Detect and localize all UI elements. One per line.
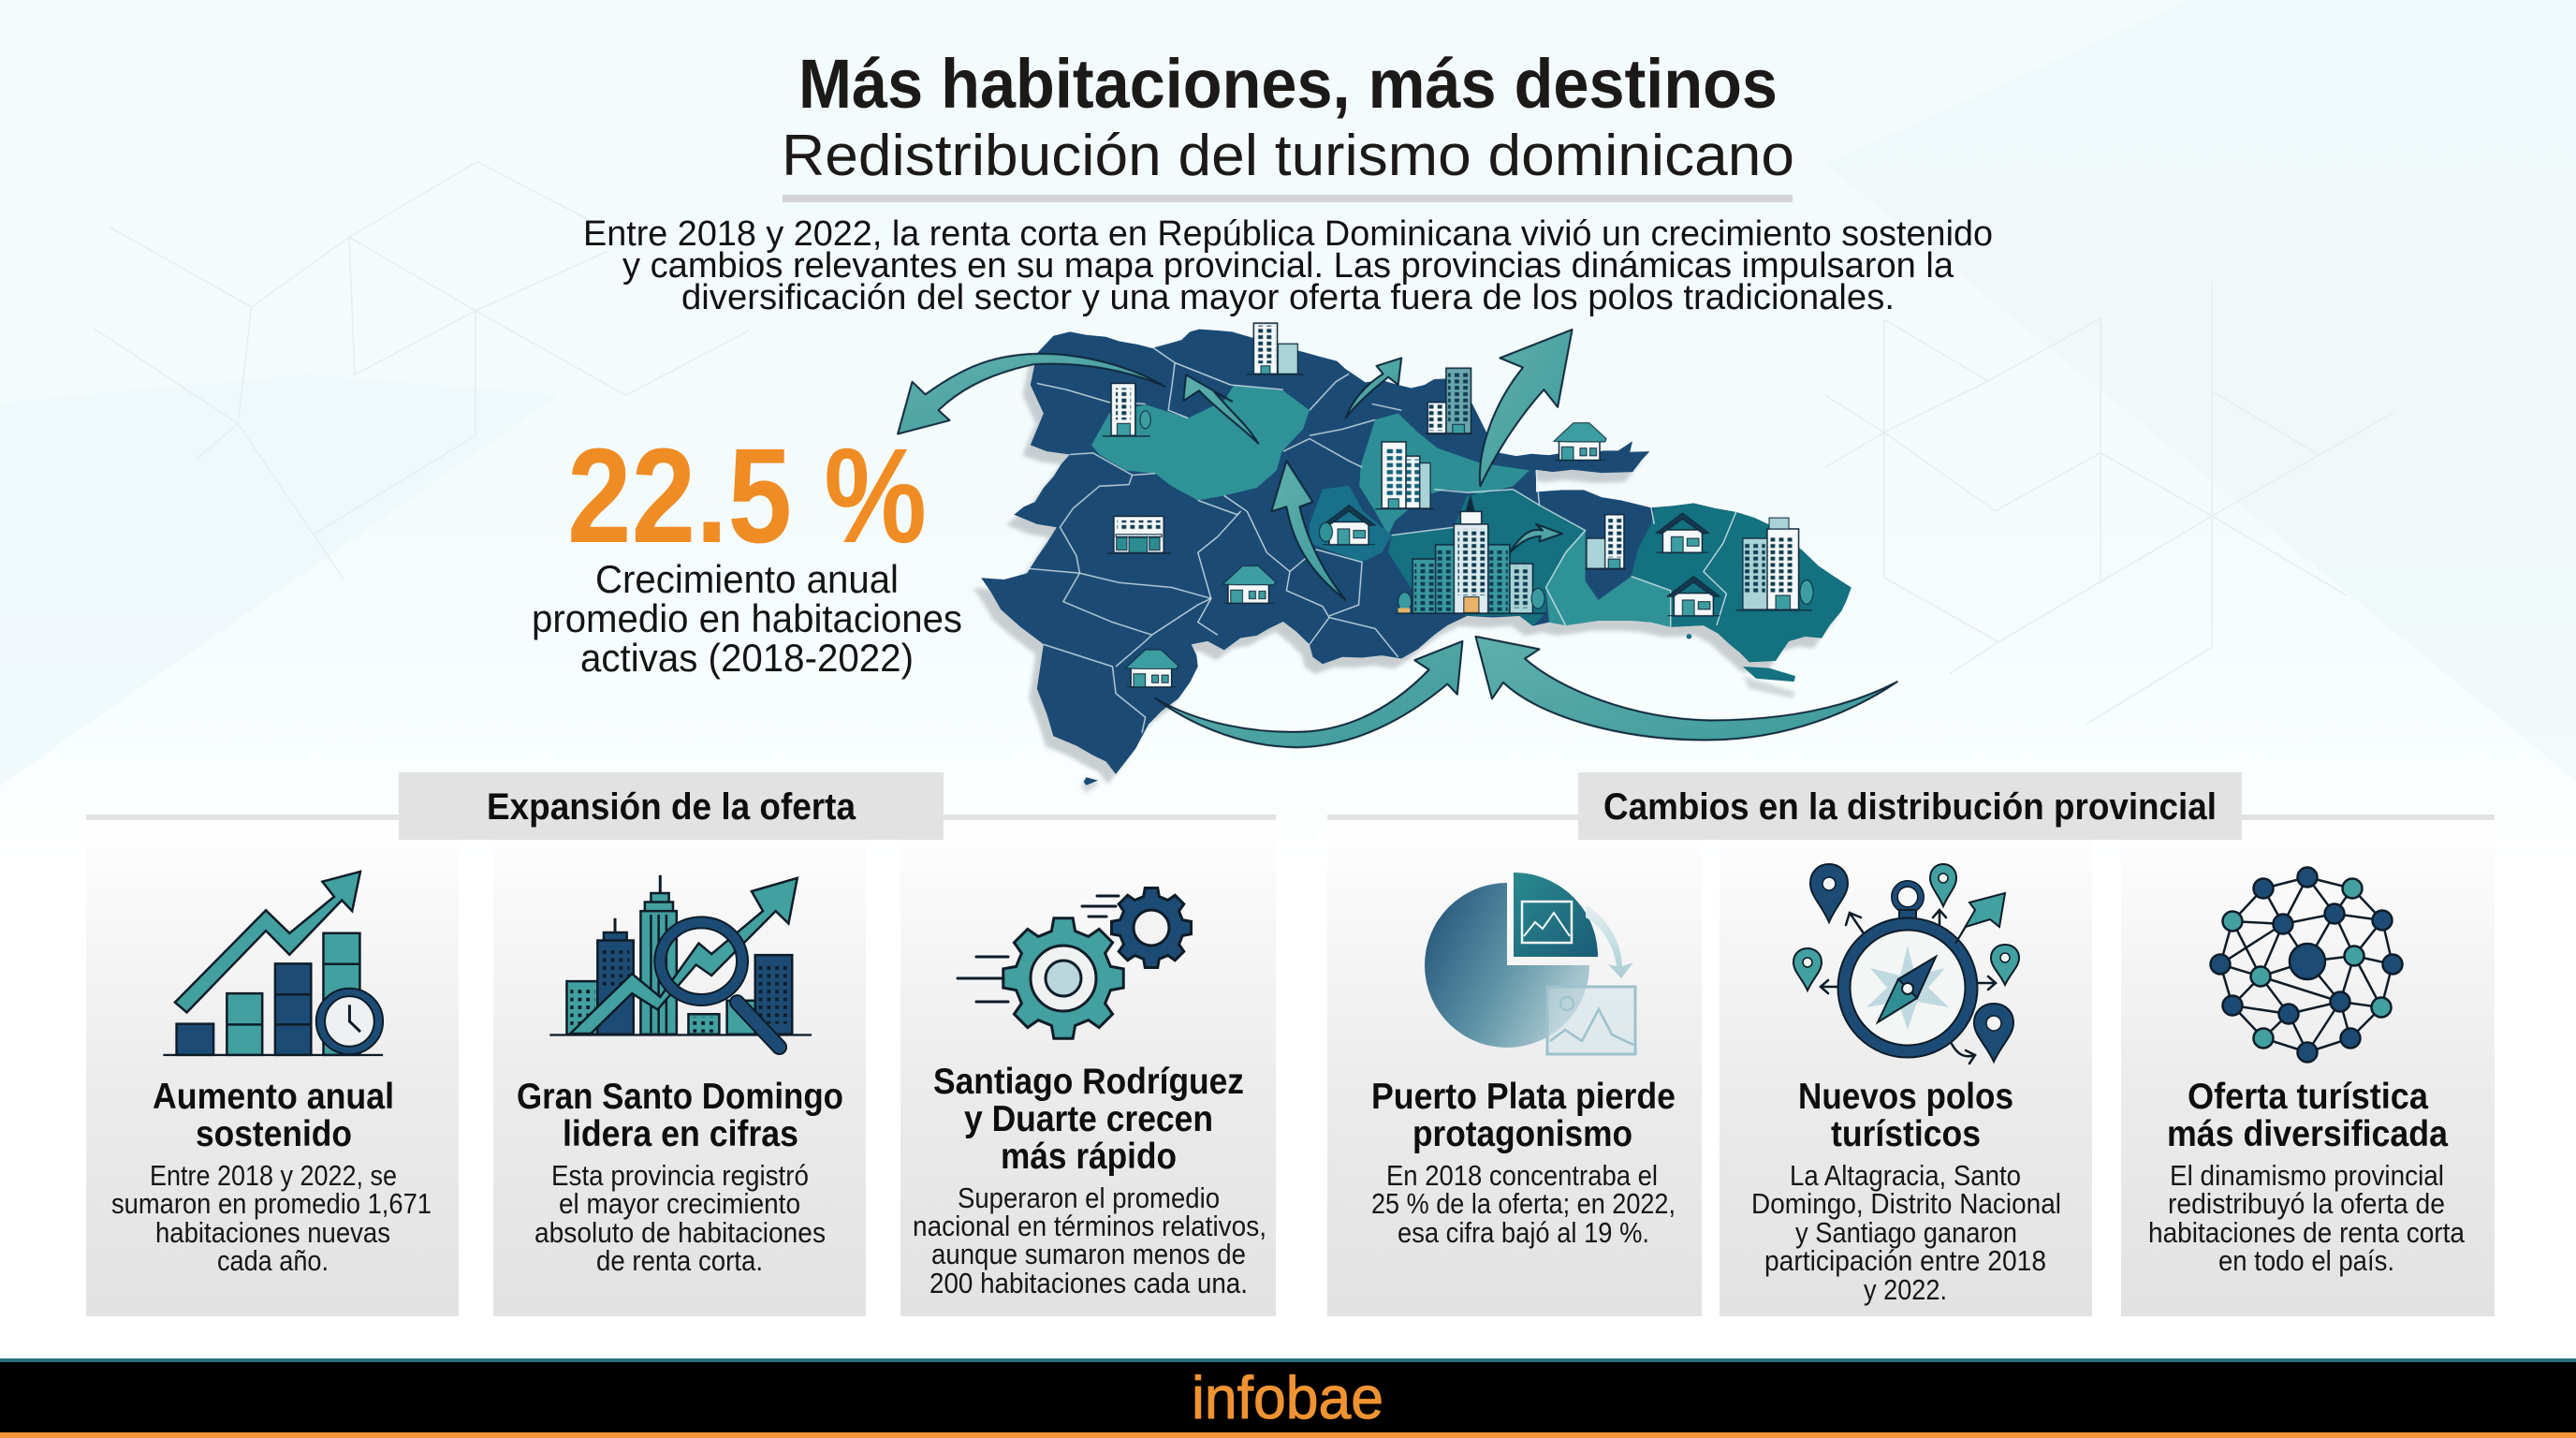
flow arrows: [898, 330, 1573, 600]
arrow: northwest: [898, 354, 1165, 434]
buildings and houses: [1103, 323, 1813, 687]
card heading: Puerto Plata pierde: [1371, 1077, 1676, 1117]
card heading: más diversificada: [2167, 1114, 2448, 1154]
card text: La Altagracia, Santo: [1790, 1159, 2021, 1192]
arrow: north-east: [1480, 330, 1573, 486]
map of the Dominican Republic: [898, 323, 1897, 793]
card heading: turísticos: [1831, 1114, 1981, 1154]
stat caption: [532, 557, 962, 680]
stat caption: Crecimiento anual: [595, 557, 899, 601]
card heading: Nuevos polos: [1798, 1077, 2013, 1117]
building: northeast: [1427, 368, 1472, 434]
card text: Domingo, Distrito Nacional: [1751, 1187, 2061, 1220]
stat value: 22.5 %: [567, 420, 927, 571]
subtitle: Redistribución del turismo dominicano: [782, 124, 1794, 188]
logo: infobae: infobae: [1192, 1364, 1383, 1431]
card text: El dinamismo provincial: [2170, 1159, 2444, 1192]
building: central north: [1375, 442, 1434, 509]
panel: Oferta turística más diversificada: [2121, 824, 2495, 1316]
card text: Esta provincia registró: [551, 1159, 809, 1192]
panel: Aumento anual sostenido: [86, 824, 459, 1316]
footer bar: [0, 1358, 2576, 1438]
card text: sumaron en promedio 1,671: [111, 1187, 432, 1220]
intro text: y cambios relevantes en su mapa provincial. Las provincias dinámicas impulsaron la: [622, 246, 1954, 286]
card heading: más rápido: [1001, 1137, 1177, 1177]
card heading: sostenido: [196, 1114, 352, 1154]
building: north coast: [1246, 323, 1304, 375]
icon: network: [2211, 867, 2402, 1062]
card heading: Aumento anual: [153, 1077, 394, 1117]
card text: esa cifra bajó al 19 %.: [1398, 1216, 1649, 1249]
card text: [534, 1159, 826, 1277]
card heading: [2167, 1077, 2448, 1154]
stat caption: activas (2018-2022): [580, 636, 914, 680]
card text: participación entre 2018: [1764, 1244, 2046, 1277]
card text: el mayor crecimiento: [559, 1187, 800, 1220]
building: central tower: [1395, 494, 1546, 614]
card text: redistribuyó la oferta de: [2168, 1187, 2445, 1220]
card text: [1751, 1159, 2061, 1306]
card text: 200 habitaciones cada una.: [929, 1267, 1248, 1299]
card heading: Santiago Rodríguez: [933, 1062, 1244, 1102]
houses: [1126, 423, 1720, 687]
card text: aunque sumaron menos de: [931, 1238, 1246, 1270]
card text: en todo el país.: [2218, 1244, 2394, 1277]
section band: Cambios en la distribución provincial: [1327, 772, 2495, 840]
section band: Expansión de la oferta: [86, 772, 1276, 840]
section band: Expansión de la oferta: Expansión de la oferta: [487, 786, 856, 828]
intro text: Entre 2018 y 2022, la renta corta en República Dominicana vivió un crecimiento sostenido: [583, 214, 1993, 254]
card text: de renta corta.: [596, 1244, 763, 1277]
province borders: [1027, 347, 1736, 733]
card text: 25 % de la oferta; en 2022,: [1371, 1187, 1676, 1220]
card text: habitaciones nuevas: [155, 1216, 390, 1249]
card text: [111, 1159, 432, 1277]
arrow: southeast to capital: [1475, 637, 1897, 740]
icon: skyline with magnifier: [549, 875, 812, 1048]
icon: pie slice with pictures: [1425, 873, 1635, 1054]
card text: y 2022.: [1864, 1273, 1947, 1306]
card text: [1371, 1159, 1676, 1249]
icon: gears: [958, 888, 1191, 1038]
card text: [913, 1181, 1266, 1299]
card heading: y Duarte crecen: [964, 1099, 1213, 1139]
arrow: center: [1271, 461, 1346, 600]
card heading: lidera en cifras: [563, 1114, 798, 1154]
card heading: protagonismo: [1412, 1114, 1632, 1154]
arrow: small east: [1510, 524, 1562, 552]
card heading: [517, 1077, 843, 1154]
card text: Entre 2018 y 2022, se: [150, 1159, 397, 1192]
card text: habitaciones de renta corta: [2148, 1216, 2466, 1249]
building: east center: [1586, 515, 1626, 570]
building: northwest: [1103, 383, 1150, 437]
arrow: north: [1346, 358, 1401, 418]
card text: En 2018 concentraba el: [1386, 1159, 1658, 1192]
key stat: 22.5 %: [532, 420, 962, 680]
card heading: [1371, 1077, 1676, 1154]
title: Más habitaciones, más destinos: [798, 45, 1778, 123]
islands: [1743, 667, 1795, 682]
panel: Santiago Rodríguez y Duarte crecen más rápido: [900, 824, 1276, 1316]
building: Punta Cana: [1736, 518, 1813, 610]
intro text: diversificación del sector y una mayor oferta fuera de los polos tradicionales.: [681, 278, 1895, 317]
card text: cada año.: [217, 1244, 329, 1277]
card text: Superaron el promedio: [958, 1181, 1220, 1214]
arrow: southwest to capital: [1155, 641, 1462, 747]
intro text: [583, 214, 1993, 317]
card heading: [933, 1062, 1244, 1177]
shop: [1107, 516, 1171, 554]
panel: Puerto Plata pierde protagonismo: [1327, 824, 1702, 1316]
panel: Nuevos polos turísticos: [1720, 824, 2092, 1316]
icon: bar chart with clock: [163, 872, 383, 1056]
panel: Gran Santo Domingo lidera en cifras: [493, 824, 866, 1316]
card heading: Oferta turística: [2188, 1077, 2428, 1117]
card text: nacional en términos relativos,: [913, 1210, 1266, 1242]
teal provinces: [1091, 385, 1852, 662]
card text: [2148, 1159, 2466, 1277]
card text: y Santiago ganaron: [1795, 1216, 2017, 1249]
arrow: interior north: [1183, 374, 1258, 444]
card heading: [1798, 1077, 2013, 1154]
icon: compass with location pins: [1793, 864, 2019, 1064]
stat caption: promedio en habitaciones: [532, 596, 962, 640]
card heading: Gran Santo Domingo: [517, 1077, 843, 1117]
section band: Cambios en la distribución provincial: Cambios en la distribución provincial: [1603, 786, 2217, 828]
card text: absoluto de habitaciones: [534, 1216, 826, 1249]
card heading: [153, 1077, 394, 1154]
